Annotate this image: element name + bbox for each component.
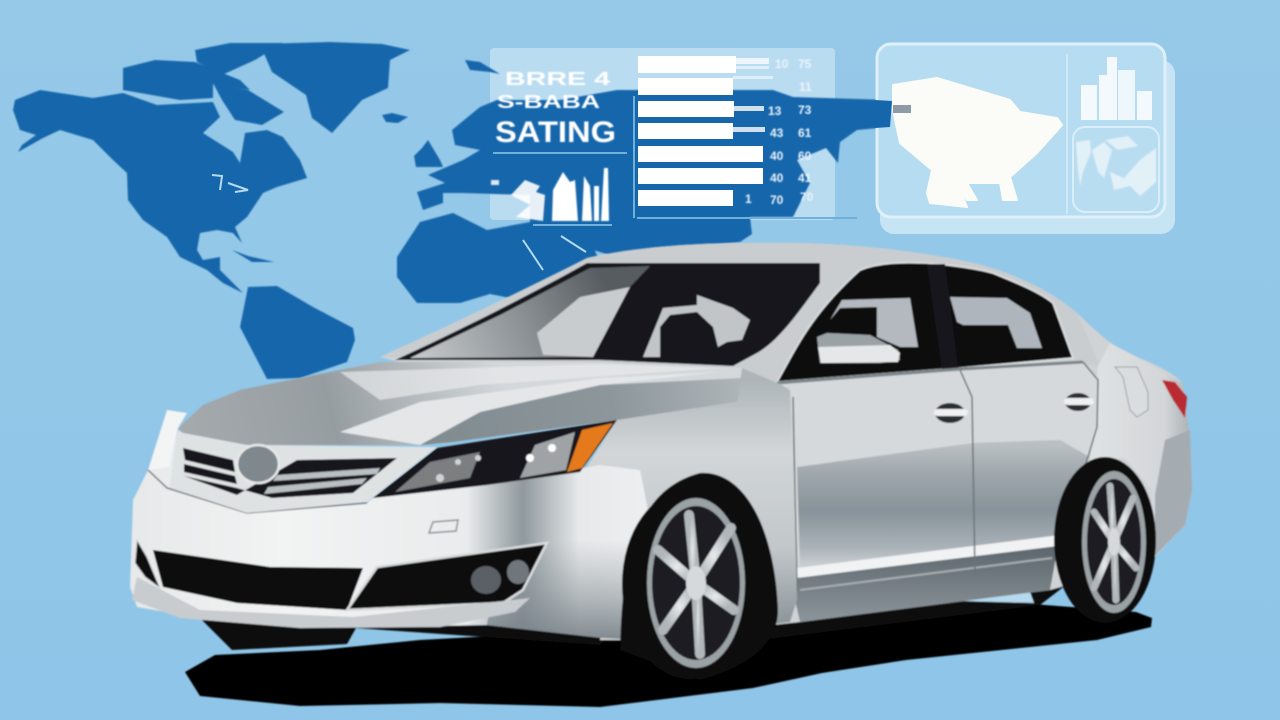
map pointer — [875, 100, 892, 128]
rear wheel — [1082, 471, 1146, 613]
hood shaded crease — [420, 378, 742, 445]
washer cap — [429, 520, 458, 533]
front bumper — [130, 430, 650, 640]
door: upper panel — [780, 362, 1098, 575]
hood — [178, 362, 742, 445]
door: white sill band — [797, 535, 1060, 578]
dashboard heading — [495, 69, 616, 149]
card body — [877, 44, 1165, 217]
fender — [583, 368, 797, 640]
light gap under sill — [925, 590, 1034, 603]
bar values: 75 — [798, 57, 812, 71]
door handle front — [934, 403, 968, 423]
bar values: 40 — [770, 171, 784, 185]
bumper crease — [148, 470, 367, 513]
grille — [183, 445, 397, 498]
windshield gray band — [410, 266, 650, 358]
bar values: 70 — [800, 190, 814, 204]
card shelf — [880, 60, 1175, 234]
badge — [237, 445, 279, 483]
door handle rear — [1064, 393, 1094, 411]
rear wheel arch — [1054, 457, 1156, 623]
front tire — [622, 489, 758, 679]
bar values: 13 — [768, 104, 782, 118]
door: rocker — [795, 546, 1058, 622]
map: Red Sea — [523, 236, 586, 270]
rear window glass — [950, 297, 1042, 348]
bar values — [745, 57, 814, 207]
map: South America — [240, 286, 355, 379]
bar values: 40 — [770, 149, 784, 163]
car — [130, 243, 1192, 707]
front seat — [660, 312, 718, 363]
map: Arctic islands — [123, 60, 250, 100]
world map — [13, 42, 890, 379]
bumper lower shade — [487, 510, 650, 640]
body: rear lower shade — [1155, 430, 1192, 556]
map: dark streak — [465, 60, 500, 74]
map: Caribbean — [232, 250, 274, 262]
belt line — [777, 362, 1083, 383]
door seams — [793, 362, 1098, 590]
map: Great Lakes — [212, 175, 248, 192]
bar values: 60 — [798, 149, 812, 163]
bar chart — [638, 56, 773, 206]
B pillar — [927, 264, 958, 369]
bar values: 73 — [798, 103, 812, 117]
mini bar chart — [1081, 57, 1152, 120]
windshield reflection — [537, 287, 630, 357]
dashboard heading: SATING — [495, 116, 616, 149]
fog lamp housing — [347, 543, 547, 610]
dashboard heading: BRRE 4 — [505, 69, 610, 89]
body: rear quarter — [1090, 343, 1192, 562]
front wheel arch — [620, 473, 778, 680]
turn signal — [567, 423, 613, 472]
card divider — [1066, 54, 1068, 214]
bar values: 70 — [770, 193, 784, 207]
taillight — [1162, 380, 1187, 418]
body: roof — [380, 243, 1100, 384]
bar values: 11 — [799, 80, 812, 94]
hood highlight — [340, 372, 720, 445]
grille surround — [170, 430, 437, 513]
headlight — [373, 420, 617, 498]
panel: rating dashboard — [491, 56, 857, 225]
front corner — [148, 410, 187, 488]
map: Eurasia — [417, 90, 890, 256]
mirror — [817, 333, 900, 363]
bar values: 61 — [798, 126, 812, 140]
left corner vent — [135, 540, 160, 588]
lower intake — [153, 550, 363, 610]
mini world map tile — [1073, 127, 1159, 212]
map: Africa — [397, 213, 600, 303]
fuel door — [1115, 367, 1148, 417]
dashboard backing — [490, 48, 835, 220]
bar values: 1 — [745, 192, 752, 206]
bar values: 43 — [770, 126, 784, 140]
body: silhouette base — [380, 243, 1192, 640]
map: Greenland — [260, 42, 410, 133]
map: British Isles — [414, 140, 443, 167]
door: rocker line — [800, 558, 1052, 590]
front window glass — [830, 298, 918, 347]
map: Iceland — [382, 113, 408, 123]
headlight inner — [395, 432, 575, 492]
dashboard heading: S-BABA — [497, 92, 600, 112]
sparkline chart — [491, 168, 609, 221]
hood top sheen — [340, 364, 720, 400]
door: lower shade — [797, 440, 1088, 568]
fog lamps — [471, 560, 529, 594]
ground shadow — [185, 601, 1152, 707]
underbody — [200, 470, 1150, 650]
dashboard dividers — [493, 96, 857, 225]
map: North America — [13, 90, 307, 293]
lower lip — [132, 577, 530, 628]
panel: glass map card — [875, 44, 1175, 234]
windshield — [395, 263, 820, 366]
bar values: 41 — [798, 171, 812, 185]
bar values: 10 — [775, 57, 789, 71]
USA map — [893, 78, 1062, 207]
rear seat reflection — [643, 295, 750, 357]
map: Baffin Island — [213, 83, 284, 125]
side windows — [777, 263, 1073, 382]
front wheel — [647, 498, 745, 668]
